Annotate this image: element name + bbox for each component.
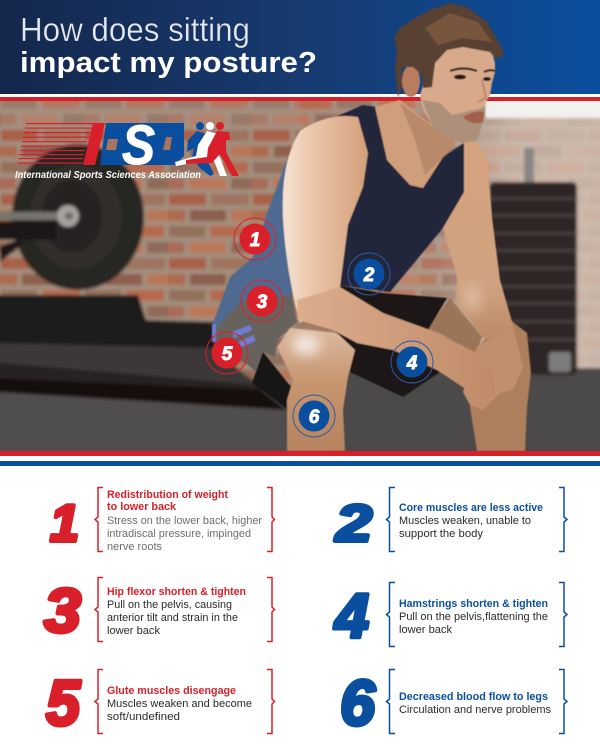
stacked weight plates xyxy=(524,148,534,184)
nose shadow xyxy=(478,80,486,102)
hair highlight xyxy=(425,13,492,45)
face xyxy=(420,46,496,124)
shorts blue straps xyxy=(212,324,255,348)
item 6 xyxy=(340,667,567,739)
marker 2 xyxy=(348,253,390,295)
text: nerve roots xyxy=(107,541,162,553)
viewer-right hand xyxy=(463,326,523,410)
stubble xyxy=(422,100,485,143)
text: lower back xyxy=(399,624,453,636)
text: soft/undefined xyxy=(107,711,180,723)
elbow highlight xyxy=(462,284,482,312)
bracket xyxy=(386,670,567,734)
logo runners xyxy=(175,122,239,176)
man xyxy=(212,3,531,451)
text: Circulation and nerve problems xyxy=(399,704,551,716)
text: Muscles weaken and become xyxy=(107,698,252,710)
logo blue block xyxy=(100,123,184,165)
marker 5 xyxy=(206,332,248,374)
marker 6 xyxy=(293,395,335,437)
marker 2: 2 xyxy=(363,265,375,286)
barbell plate xyxy=(12,144,144,290)
logo letter S: S xyxy=(122,113,155,176)
navy tank top xyxy=(336,104,464,293)
text xyxy=(107,586,246,637)
marker 3 xyxy=(241,280,283,322)
logo letter I xyxy=(83,123,105,165)
marker 3: 3 xyxy=(257,292,268,313)
logo: ISSA xyxy=(15,113,239,181)
eyes and brows xyxy=(450,68,495,72)
front knee and lower leg xyxy=(277,328,355,451)
viewer-right upper arm xyxy=(443,142,513,345)
text: to lower back xyxy=(107,501,177,513)
mouth xyxy=(463,112,484,123)
viewer-left upper arm xyxy=(283,116,368,323)
logo caption: International Sports Sciences Association xyxy=(15,170,201,181)
item 2 xyxy=(335,488,567,553)
brick wall xyxy=(0,96,600,396)
marker 1: 1 xyxy=(250,230,260,251)
text: Hip flexor shorten & tighten xyxy=(107,586,246,598)
logo speed stripes xyxy=(18,123,93,164)
numeral 1: 1 xyxy=(50,495,79,553)
bracket xyxy=(95,488,274,552)
item 3 xyxy=(44,577,274,646)
numeral 2: 2 xyxy=(335,495,372,553)
floor xyxy=(0,385,326,455)
forearm and left hand xyxy=(296,286,476,388)
chest shadow xyxy=(400,103,455,175)
text: intradiscal pressure, impinged xyxy=(107,528,251,540)
text: support the body xyxy=(399,528,484,540)
bench xyxy=(0,343,262,385)
marker 5: 5 xyxy=(222,344,233,365)
neck xyxy=(374,100,444,189)
back thigh xyxy=(428,298,482,353)
grey shorts xyxy=(214,295,297,378)
title: impact my posture? xyxy=(20,47,317,79)
text xyxy=(107,685,252,723)
dark shorts xyxy=(335,285,447,397)
text: Muscles weaken, unable to xyxy=(399,515,531,527)
bracket xyxy=(386,488,567,552)
numeral 6: 6 xyxy=(340,667,375,739)
text: Core muscles are less active xyxy=(399,502,543,514)
text xyxy=(107,489,262,553)
bracket xyxy=(386,582,567,646)
marker 4: 4 xyxy=(406,353,418,374)
text: Redistribution of weight xyxy=(107,489,228,501)
numeral 4: 4 xyxy=(333,582,369,651)
hair xyxy=(394,3,503,97)
bracket xyxy=(95,670,274,734)
photo background: gym xyxy=(0,96,600,456)
logo notches xyxy=(106,137,172,150)
bracket xyxy=(95,578,274,642)
text: Stress on the lower back, higher xyxy=(107,515,262,527)
text: Glute muscles disengage xyxy=(107,685,236,697)
ear xyxy=(402,65,420,97)
header band xyxy=(0,0,600,101)
text: Pull on the pelvis,flattening the xyxy=(399,611,548,623)
text xyxy=(399,598,548,636)
grey-blue tank side xyxy=(213,130,300,332)
shadow under thigh xyxy=(252,352,295,409)
marker 4 xyxy=(391,341,433,383)
back lower leg xyxy=(470,316,531,451)
dark rubber plates at back xyxy=(0,295,216,350)
knee highlight xyxy=(292,335,320,355)
item 4 xyxy=(333,582,567,651)
numeral 5: 5 xyxy=(46,667,81,739)
text: Hamstrings shorten & tighten xyxy=(399,598,548,610)
title xyxy=(20,11,317,79)
text xyxy=(399,502,543,540)
text: lower back xyxy=(107,625,161,637)
numeral 3: 3 xyxy=(44,577,81,646)
item 5 xyxy=(46,667,274,739)
marker 1 xyxy=(234,218,276,260)
tricolor divider xyxy=(0,451,600,466)
text: Decreased blood flow to legs xyxy=(399,691,548,703)
text: Pull on the pelvis, causing xyxy=(107,599,232,611)
title: How does sitting xyxy=(20,11,250,48)
text: anterior tilt and strain in the xyxy=(107,612,238,624)
marker 6: 6 xyxy=(309,407,320,428)
item 1 xyxy=(50,488,274,553)
text xyxy=(399,691,551,716)
